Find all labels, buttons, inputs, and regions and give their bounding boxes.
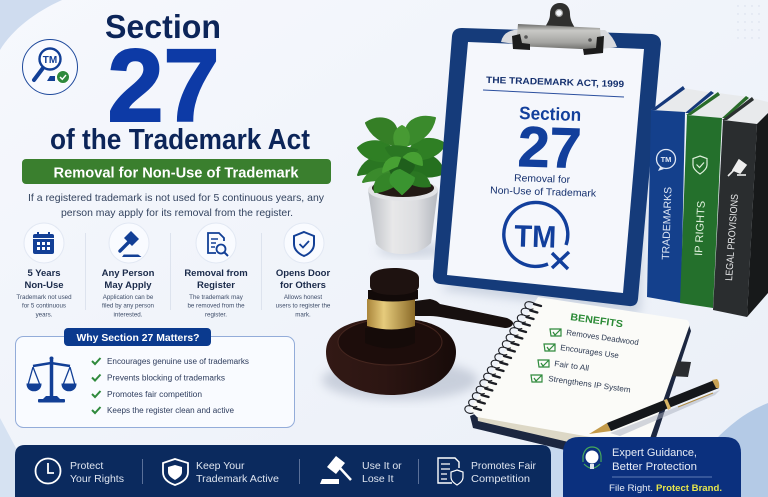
feature: removal from register: The trademark may <box>189 294 244 301</box>
item: protect your rights: Your Rights <box>70 473 124 485</box>
item: promotes fair competition: Promotes Fair <box>471 460 536 472</box>
book: legal provisions: LEGAL PROVISIONS <box>724 193 741 281</box>
title <box>50 8 310 156</box>
feature: removal from register: be removed from the <box>187 302 245 310</box>
clipboard text: THE TRADEMARK ACT, 1999 <box>486 75 624 89</box>
title: 27 <box>108 28 220 143</box>
notebook text <box>531 312 639 395</box>
item: use it or lose it: Lose It <box>362 473 394 485</box>
bottom banner <box>15 445 551 497</box>
feature: removal from register: Removal from <box>184 268 248 279</box>
item: promotes fair competition: Competition <box>471 473 530 485</box>
feature: removal from register: Register <box>197 280 235 291</box>
callout: expert guidance <box>563 437 741 497</box>
feature: 5 years non-use: Trademark not used <box>16 294 72 301</box>
item: use it or lose it <box>320 456 402 485</box>
notebook text: Encourages Use <box>560 343 620 360</box>
panel: why section 27 matters <box>16 328 294 428</box>
icon: TM bubble <box>656 150 676 171</box>
plant in pot <box>358 117 447 257</box>
item: protect your rights: Protect <box>70 460 103 472</box>
intro text: If a registered trademark is not used for 5 continuous years, any <box>28 192 325 204</box>
notebook text: Removes Deadwood <box>566 328 639 347</box>
checklist: Prevents blocking of trademarks <box>107 374 225 382</box>
checklist: Promotes fair competition <box>107 390 202 399</box>
icon: bulb headset <box>583 447 601 469</box>
notebook <box>465 297 691 460</box>
panel heading: Why Section 27 Matters? <box>76 332 200 344</box>
title: Section <box>105 8 221 45</box>
feature: opens door for others: Opens Door <box>276 268 330 279</box>
gavel head <box>365 268 419 348</box>
notebook text: Strengthens IP System <box>548 374 632 395</box>
checklist <box>92 357 249 415</box>
panel heading <box>64 328 211 346</box>
feature: any person may apply: May Apply <box>104 280 152 291</box>
icon: TM bubble: TM <box>661 155 671 164</box>
clipboard text: Removal for <box>514 173 571 186</box>
gavel and sound block <box>322 268 513 400</box>
feature: 5 years non-use: Non-Use <box>24 280 64 291</box>
feature: 5 years non-use: for 5 continuous <box>22 302 66 310</box>
item: keep your trademark active <box>163 459 279 485</box>
books <box>647 86 768 317</box>
notebook text: Fair to All <box>554 359 590 373</box>
gavel handle <box>415 299 513 328</box>
checklist: Encourages genuine use of trademarks <box>107 357 249 366</box>
feature: 5 years non-use: 5 Years <box>27 268 61 279</box>
feature: any person may apply <box>102 223 155 318</box>
pot <box>368 181 438 254</box>
icon: scales of justice <box>27 356 76 402</box>
callout: expert guidance: Better Protection <box>612 461 697 473</box>
book: IP rights <box>680 92 749 308</box>
book: trademarks: TRADEMARKS <box>660 187 675 260</box>
notebook spiral <box>465 302 541 413</box>
leaves <box>358 117 445 194</box>
pen <box>589 379 720 436</box>
feature: any person may apply: Application can be <box>103 294 154 301</box>
clipboard text: 27 <box>517 115 582 181</box>
icon: TM crossed out: TM <box>514 218 557 255</box>
clipboard <box>433 3 661 315</box>
feature: removal from register: register. <box>205 312 227 318</box>
subtitle banner <box>22 159 331 184</box>
callout: expert guidance: Protect Brand. <box>656 483 722 494</box>
item: promotes fair competition <box>438 458 536 485</box>
feature: opens door for others: Allows honest <box>284 294 322 301</box>
item: protect your rights <box>36 458 124 485</box>
feature: opens door for others: for Others <box>280 280 326 291</box>
divider <box>86 233 262 310</box>
icon: trademark search badge: TM <box>43 55 57 66</box>
book: IP rights: IP RIGHTS <box>693 201 708 256</box>
clipboard text: Section <box>519 103 581 125</box>
feature: any person may apply: Any Person <box>102 268 155 279</box>
feature: 5 years non-use: years. <box>36 312 53 318</box>
feature: any person may apply: filed by any person <box>102 302 155 310</box>
intro text <box>28 192 325 219</box>
feature: opens door for others <box>276 223 331 318</box>
feature: 5 years non-use <box>16 223 72 318</box>
feature: any person may apply: interested. <box>114 312 143 318</box>
item: keep your trademark active: Trademark Active <box>196 473 279 485</box>
clipboard text <box>483 75 624 269</box>
feature: removal from register <box>184 223 248 318</box>
icon: trademark search badge <box>22 40 78 94</box>
notebook text: BENEFITS <box>570 312 624 330</box>
item: use it or lose it: Use It or <box>362 460 402 472</box>
feature: opens door for others: mark. <box>295 312 311 318</box>
item: keep your trademark active: Keep Your <box>196 460 245 472</box>
feature: opens door for others: users to register the <box>276 302 331 310</box>
book: trademarks <box>647 86 714 303</box>
subtitle banner: Removal for Non-Use of Trademark <box>54 166 299 182</box>
checklist: Keeps the register clean and active <box>107 406 235 415</box>
callout: expert guidance: Expert Guidance, <box>612 447 697 459</box>
intro text: person may apply for its removal from the register. <box>61 207 293 219</box>
title: of the Trademark Act <box>50 124 310 156</box>
icon: TM crossed out <box>504 202 569 269</box>
clipboard clip <box>501 3 617 55</box>
clipboard text: Non-Use of Trademark <box>490 185 597 200</box>
book: legal provisions <box>713 97 768 317</box>
callout: expert guidance: File Right. <box>609 483 653 494</box>
